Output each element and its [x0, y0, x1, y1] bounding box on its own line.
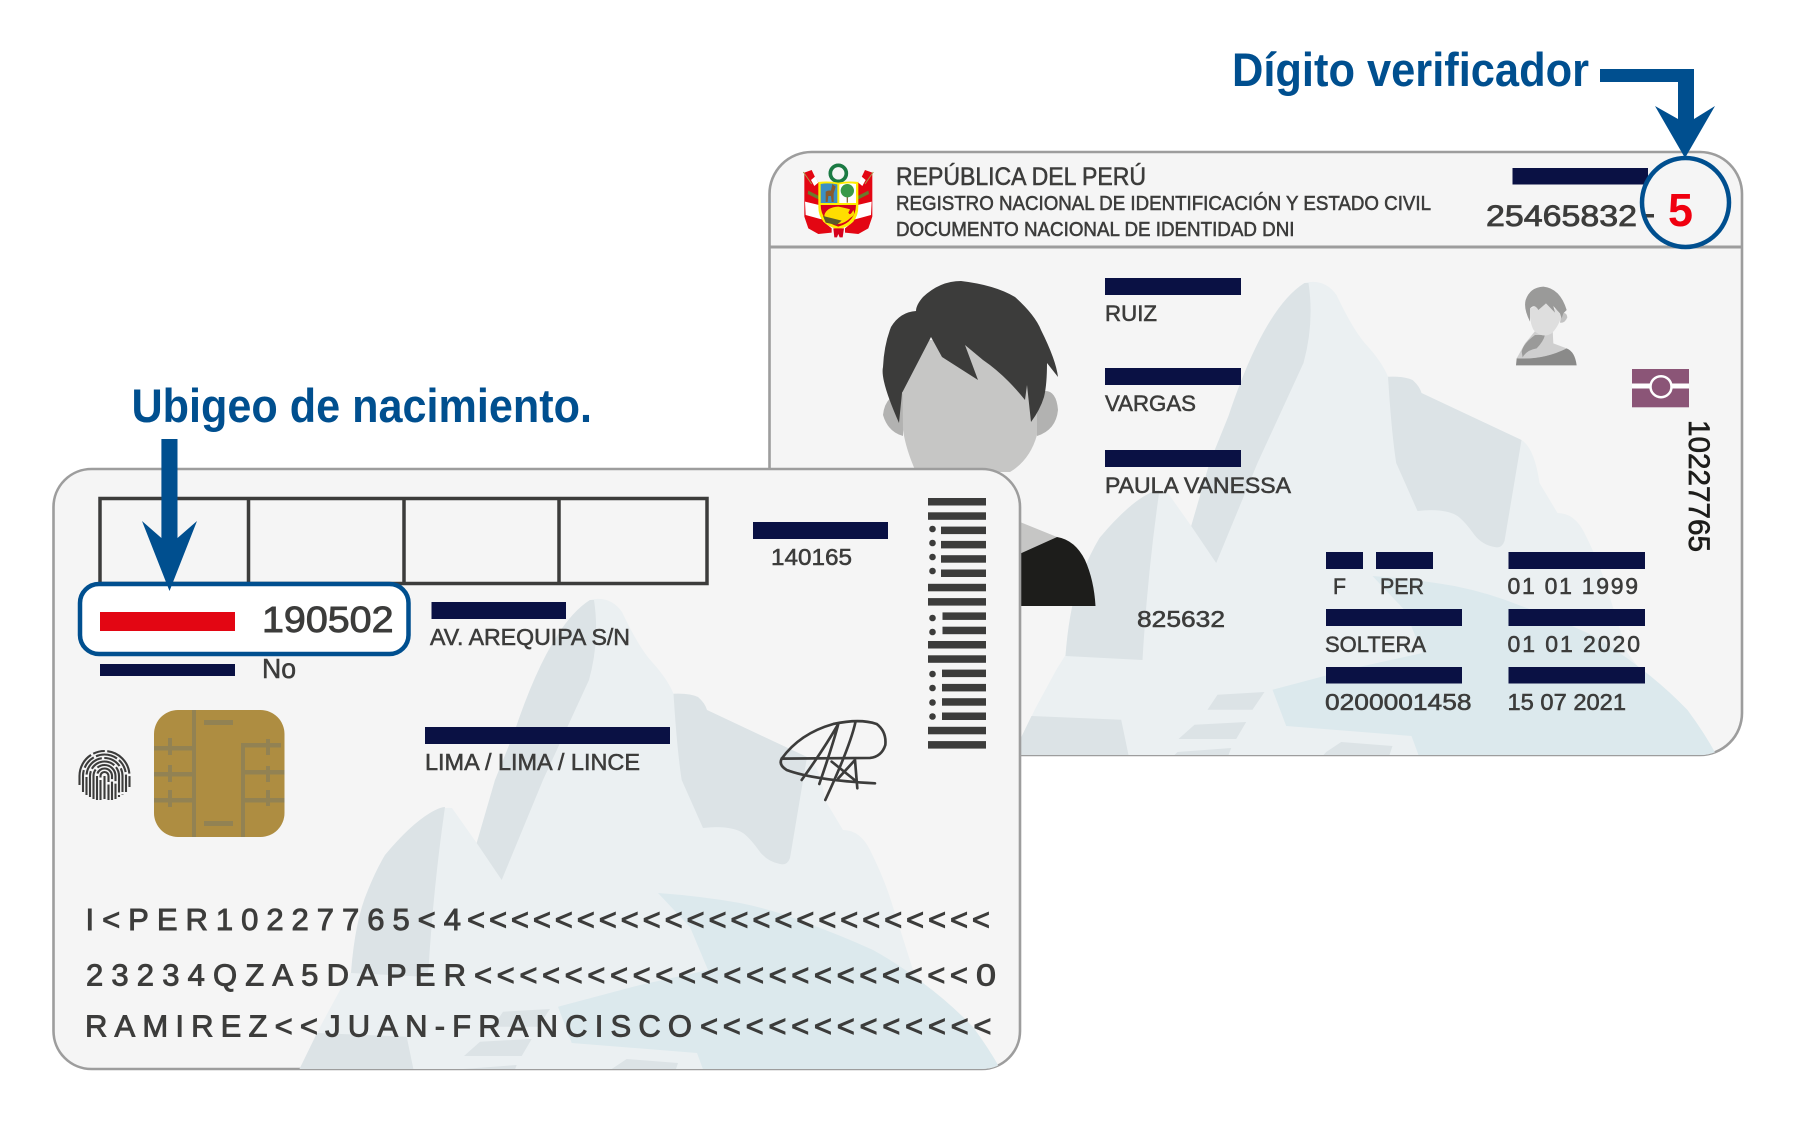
- field: code 140165: [753, 522, 888, 570]
- heading: Dígito verificador: Dígito verificador: [1232, 43, 1589, 96]
- field: nombres: PAULA VANESSA: [1105, 473, 1291, 498]
- icon: small ghost portrait: [1516, 287, 1577, 365]
- empty boxes table: [100, 498, 707, 584]
- field: estado civil: [1325, 609, 1462, 657]
- text: vertical number: 10227765: [1682, 420, 1715, 552]
- field: sexo: [1326, 552, 1363, 599]
- icon: chip: [154, 710, 284, 837]
- field: No: No: [262, 653, 296, 684]
- heading: Ubigeo de nacimiento: Ubigeo de nacimiento.: [132, 379, 592, 432]
- field: nombres: [1105, 450, 1291, 498]
- text: DNI number: 25465832: [1486, 200, 1637, 233]
- panel: front-positioned DNI card (back side): [54, 469, 1020, 1072]
- text: hyphen: [1643, 214, 1654, 218]
- icon: portrait photo: [883, 281, 1096, 606]
- field: district: LIMA / LIMA / LINCE: [425, 749, 640, 775]
- MRZ line 2: 23234QZA5DAPER: [86, 958, 466, 992]
- MRZ line 2: 0: [976, 958, 996, 992]
- field: apellido materno: [1105, 368, 1241, 416]
- field: registro: 0200001458: [1325, 689, 1472, 715]
- field: code 140165: 140165: [771, 544, 852, 570]
- card background: [54, 469, 1020, 1069]
- MRZ line 3: [85, 1008, 992, 1044]
- field: apellido materno: VARGAS: [1105, 391, 1196, 416]
- MRZ line 1: [86, 902, 990, 937]
- text: República del Perú: REPÚBLICA DEL PERÚ: [896, 162, 1146, 191]
- icon: signature: [781, 721, 885, 800]
- MRZ line 2: <<<<<<<<<<<<<<<<<<<<<<: [474, 958, 968, 992]
- highlighted ubigeo box: 190502: [262, 599, 394, 640]
- MRZ line 2: [86, 958, 996, 992]
- field: sexo: F: [1333, 574, 1346, 599]
- text: check digit: 5: [1668, 184, 1693, 236]
- callout circle around check digit: [1642, 158, 1729, 247]
- field: address: [430, 602, 630, 650]
- text: Registro Nacional: REGISTRO NACIONAL DE IDENTIFICACIÓN Y ESTADO CIVIL: [896, 192, 1431, 215]
- field: fecha nacimiento: 01 01 1999: [1508, 573, 1638, 599]
- field: nacionalidad: PER: [1380, 574, 1424, 599]
- icon: fingerprint: [80, 751, 130, 800]
- MRZ line 1: I<PER10227765<4: [86, 902, 461, 937]
- arrow: to ubigeo: [142, 439, 197, 591]
- field: fecha caducidad: [1508, 667, 1645, 715]
- field: fecha caducidad: 15 07 2021: [1508, 689, 1626, 715]
- arrow: to check digit: [1600, 69, 1715, 158]
- icon: hologram flag: [1632, 369, 1689, 407]
- panel: back-positioned DNI card (front side): [770, 152, 1742, 755]
- highlighted ubigeo box: [80, 584, 408, 654]
- field: district: [425, 727, 670, 775]
- MRZ line 3: <<<<<<<<<<<<<: [700, 1008, 992, 1044]
- barcode: [928, 498, 986, 749]
- field: registro: [1325, 667, 1472, 715]
- field: apellido paterno: RUIZ: [1105, 301, 1157, 326]
- MRZ line 3: RAMIREZ<<JUAN-FRANCISCO: [85, 1008, 692, 1044]
- bar: DNI label: [1512, 168, 1648, 184]
- header divider: [770, 246, 1742, 248]
- MRZ line 1: <<<<<<<<<<<<<<<<<<<<<<<<: [467, 902, 990, 937]
- field: code: 825632: [1137, 606, 1225, 632]
- card background: [770, 152, 1742, 755]
- field: fecha emision: [1508, 609, 1645, 657]
- field: address: AV. AREQUIPA S/N: [430, 624, 630, 650]
- mountain watermark: [298, 599, 1003, 1072]
- field: estado civil: SOLTERA: [1325, 632, 1426, 657]
- text: Documento Nacional: DOCUMENTO NACIONAL DE IDENTIDAD DNI: [896, 219, 1294, 241]
- field: nacionalidad: [1376, 552, 1433, 599]
- field: apellido paterno: [1105, 278, 1241, 326]
- field: fecha emision: 01 01 2020: [1508, 631, 1640, 657]
- icon: coat of arms of Peru: [803, 165, 873, 237]
- field: No: [100, 653, 296, 684]
- field: fecha nacimiento: [1508, 552, 1645, 599]
- mountain watermark: [1012, 282, 1718, 755]
